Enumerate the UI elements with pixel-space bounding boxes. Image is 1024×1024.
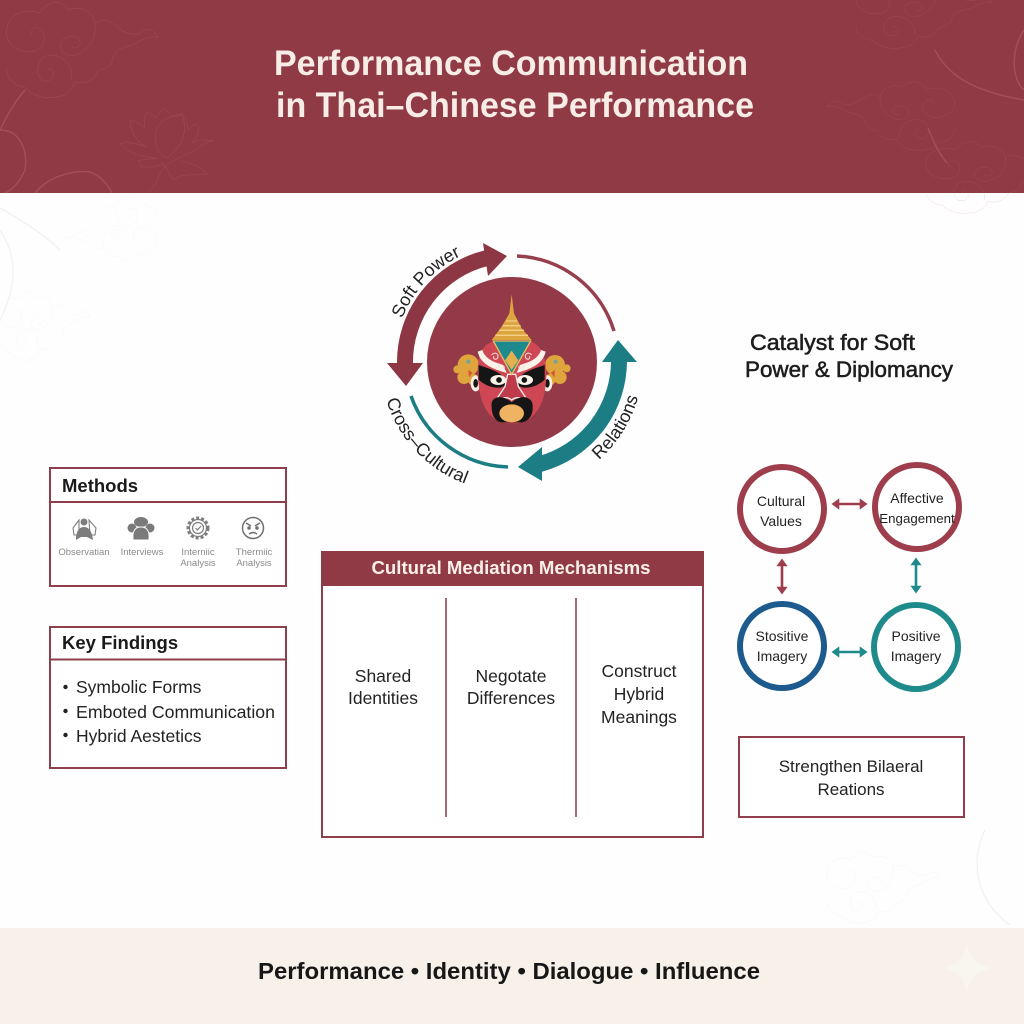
footer keywords: Performance • Identity • Dialogue • Influence [258, 958, 760, 984]
title: Performance Communication [274, 44, 748, 83]
node: stositive imagery: Stositive [756, 628, 808, 644]
header ornament: clouds and lotus [0, 0, 1024, 213]
icon: observation [73, 518, 96, 540]
background pattern: faint clouds and lotus [0, 198, 1024, 925]
label: internic analysis: Analysis [180, 558, 216, 569]
node: cultural values: Values [760, 513, 802, 529]
list: findings: Symbolic Forms [76, 677, 202, 697]
arrow: soft power [387, 243, 507, 386]
label: thermic analysis: Thermiic [236, 547, 272, 558]
column: construct hybrid meanings: Meanings [601, 707, 677, 727]
footer band [0, 928, 1024, 1024]
icon: interviews [128, 517, 154, 540]
heading: methods: Methods [62, 475, 138, 496]
title: in Thai–Chinese Performance [276, 86, 754, 125]
column: shared identities: Shared [355, 666, 411, 686]
panel: key findings [50, 627, 286, 768]
node: affective engagement: Affective [890, 490, 944, 506]
label: Cross-Cultural: Cross–Cultural [388, 398, 469, 484]
arc: lower left [411, 396, 508, 467]
node: cultural values [740, 467, 824, 551]
arrow: top link [832, 499, 867, 509]
node: positive imagery: Positive [891, 628, 941, 644]
heading: Catalyst for Soft Power & Diplomancy: Power & Diplomancy [745, 357, 953, 382]
arrow: right link [911, 558, 921, 593]
node: stositive imagery: Imagery [757, 648, 807, 664]
cycle diagram [387, 243, 638, 484]
column: construct hybrid meanings: Hybrid [614, 684, 664, 704]
column: negotiate differences: Differences [467, 688, 555, 708]
panel: cultural mediation mechanisms [321, 551, 704, 837]
icon: interpretive gear [188, 518, 208, 538]
arrow: bottom link [832, 647, 867, 657]
label: observation: Observatian [58, 547, 110, 558]
arc: upper right [517, 256, 614, 331]
callout: strengthen bilateral relations [739, 737, 964, 817]
panel header: Cultural Mediation Mechanisms [372, 558, 650, 578]
title [274, 44, 754, 125]
label: interviews: Interviews [121, 547, 164, 558]
header banner [0, 0, 1024, 213]
list: findings: Hybrid Aestetics [76, 726, 202, 746]
heading: key findings: Key Findings [62, 632, 178, 653]
label: Relations: Relations [592, 396, 638, 460]
column: negotiate differences: Negotate [475, 666, 547, 686]
node: cultural values: Cultural [757, 493, 805, 509]
network: four linked circles [740, 465, 959, 689]
node: positive imagery [874, 605, 958, 689]
list: findings [63, 677, 275, 746]
callout: strengthen bilateral relations: Strengthen Bilaeral [779, 757, 923, 776]
panel header [321, 551, 704, 586]
icon: thermic face [242, 518, 264, 538]
node: affective engagement: Engagement [879, 511, 955, 526]
heading: Catalyst for Soft Power & Diplomancy [745, 330, 953, 382]
node: positive imagery: Imagery [891, 648, 941, 664]
label: internic analysis: Interniic [181, 547, 215, 558]
list: findings: Emboted Communication [76, 702, 275, 722]
callout: strengthen bilateral relations: Reations [817, 780, 885, 799]
label: thermic analysis: Analysis [236, 558, 272, 569]
heading: Catalyst for Soft Power & Diplomancy: Catalyst for Soft [750, 330, 915, 355]
centre circle [427, 277, 597, 447]
icon: Thai–Chinese opera mask [453, 294, 571, 423]
panel: methods [50, 468, 286, 586]
icon: sparkle [944, 944, 990, 992]
label: Soft Power: Soft Power [392, 247, 458, 317]
arrow: relations [518, 340, 637, 481]
node: stositive imagery [740, 604, 824, 688]
arrow: left link [777, 559, 787, 594]
column: construct hybrid meanings: Construct [602, 661, 676, 681]
node: affective engagement [875, 465, 959, 549]
column: shared identities: Identities [348, 688, 418, 708]
